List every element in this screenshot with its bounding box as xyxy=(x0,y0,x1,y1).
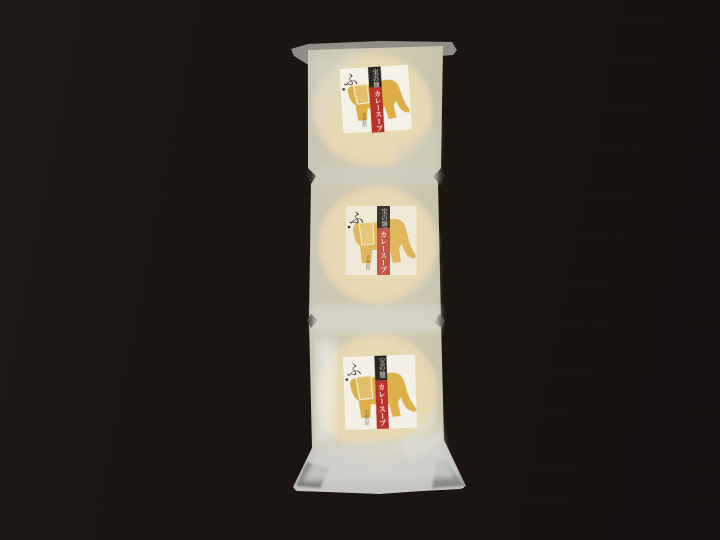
maker name: 不雲屋 xyxy=(360,112,367,129)
bun: middle xyxy=(318,186,438,304)
logo dot xyxy=(342,88,345,91)
product name: 宝の麺 xyxy=(371,67,379,89)
bag bottom right folds xyxy=(432,458,464,488)
product strip red xyxy=(375,380,389,429)
maker name: 不雲屋 xyxy=(364,254,370,271)
elephant illustration xyxy=(353,219,416,263)
bun: bottom xyxy=(317,333,439,457)
product strip black xyxy=(374,355,387,381)
product name: 宝の麺 xyxy=(377,356,386,379)
logo mark: ふ xyxy=(346,362,362,379)
dark pinch points between buns xyxy=(306,168,445,328)
product strip red xyxy=(369,87,385,133)
label: middle bun xyxy=(346,206,416,275)
soup name: カレースープ xyxy=(380,231,388,273)
product name: 宝の麺 xyxy=(380,207,387,229)
product strip black xyxy=(377,206,390,228)
soup name: カレースープ xyxy=(372,90,383,132)
logo dot xyxy=(345,378,348,381)
bun: top xyxy=(313,53,433,167)
logo dot xyxy=(348,226,350,228)
elephant illustration xyxy=(347,78,410,121)
product strip red xyxy=(377,228,390,275)
label: bottom bun xyxy=(343,354,417,430)
bag bottom seal xyxy=(294,444,464,494)
elephant saddle cloth xyxy=(359,222,374,245)
elephant illustration xyxy=(350,372,417,419)
plastic bag xyxy=(291,41,466,494)
maker name: 不雲屋 xyxy=(363,409,370,427)
logo mark: ふ xyxy=(343,73,358,89)
logo mark: ふ xyxy=(349,211,364,227)
bag body xyxy=(293,46,466,493)
label: top bun xyxy=(340,65,412,135)
bag haze and highlights xyxy=(302,52,456,482)
bag bottom left folds xyxy=(296,462,330,488)
elephant saddle cloth xyxy=(353,84,369,104)
bag top seal xyxy=(291,41,457,66)
product strip black xyxy=(368,66,382,88)
soup name: カレースープ xyxy=(377,383,387,427)
elephant saddle cloth xyxy=(356,376,373,400)
